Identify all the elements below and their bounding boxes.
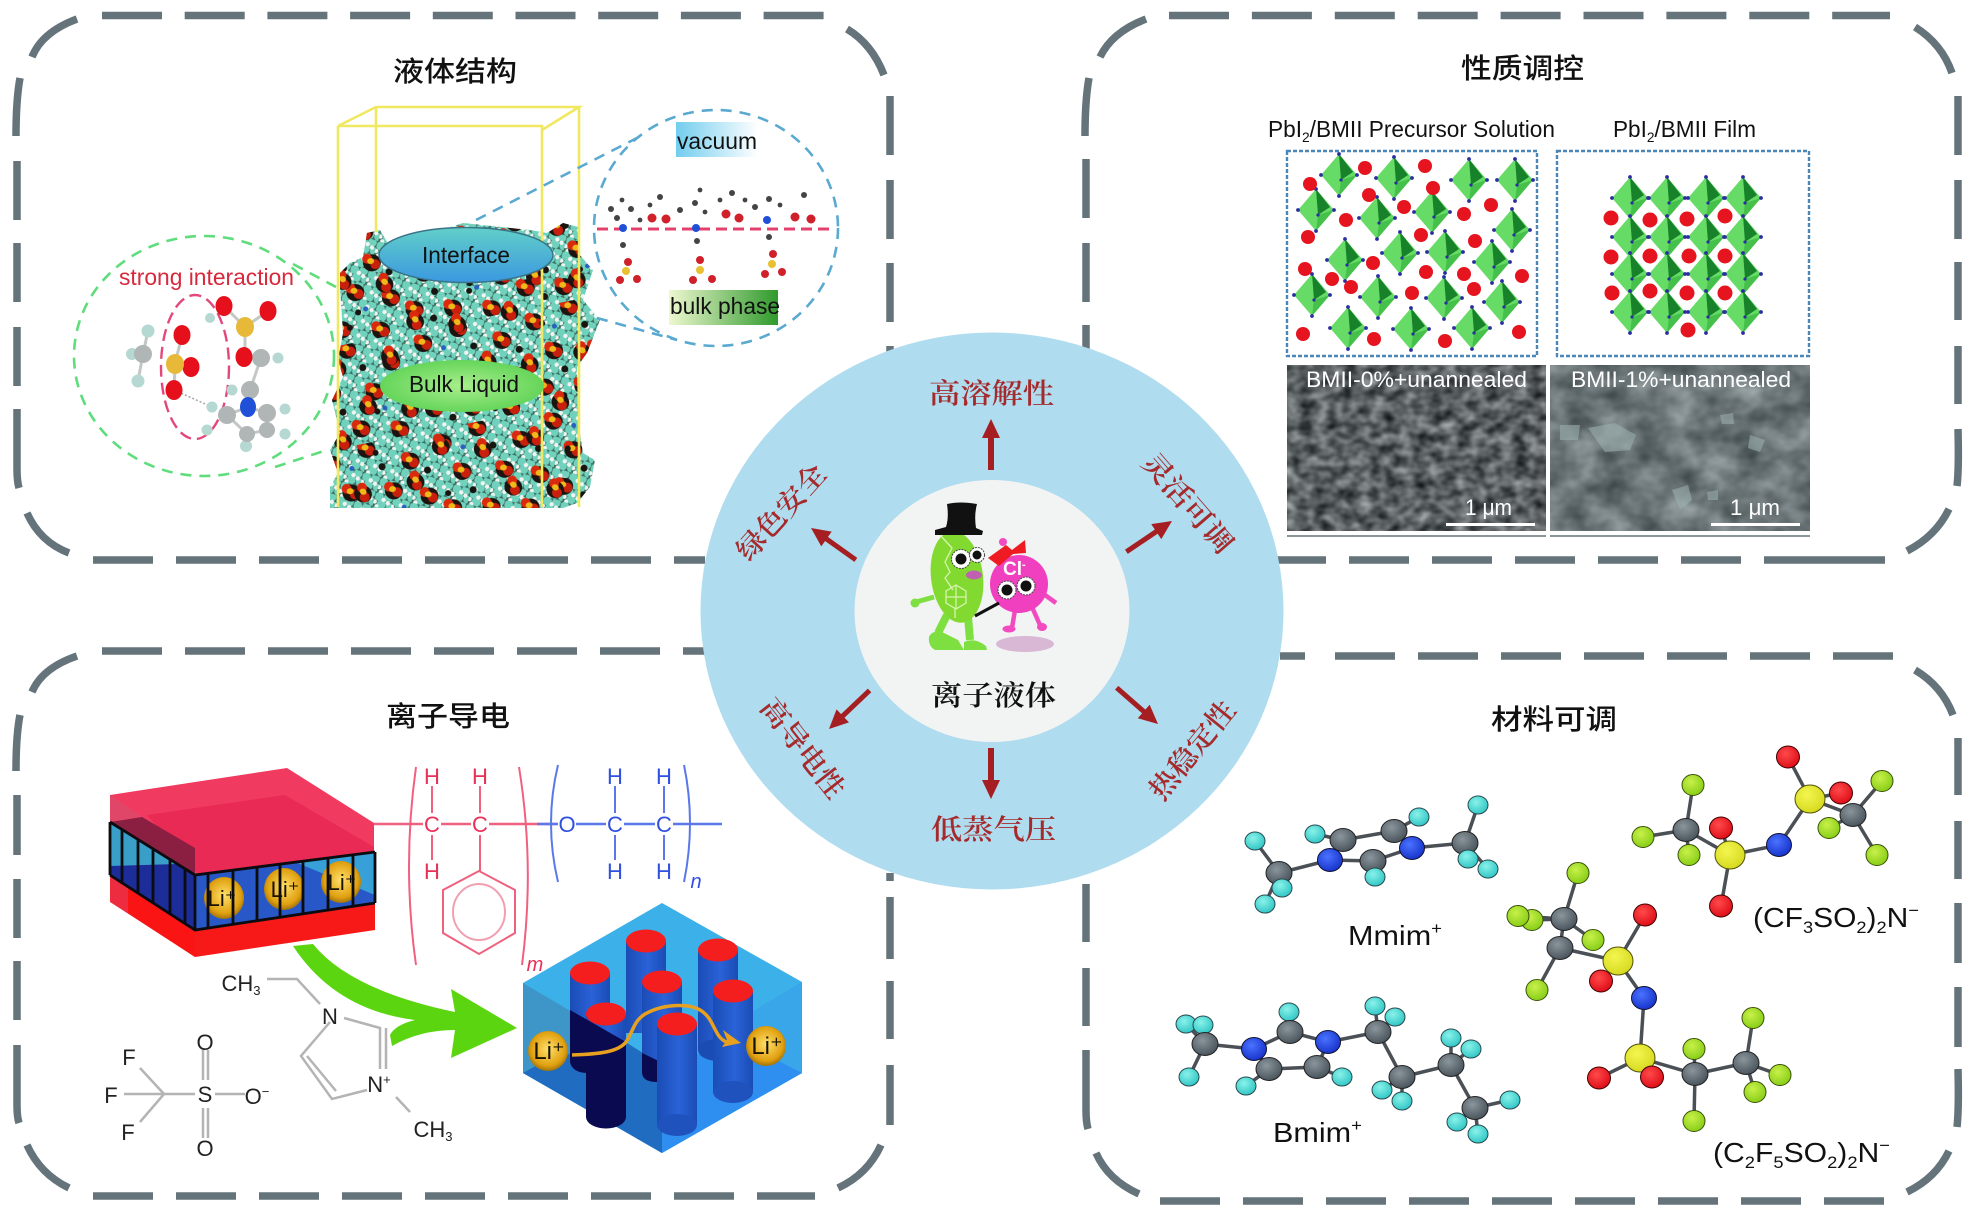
arrow: green curved bbox=[293, 944, 517, 1058]
imidazolium cation structure: N bbox=[322, 1004, 338, 1029]
label: (CF3SO2)2N-: ) bbox=[1867, 902, 1877, 933]
pink anion character: Cl bbox=[1003, 559, 1022, 580]
triflate anion structure: O bbox=[196, 1030, 214, 1055]
center title: 离子液体 bbox=[931, 680, 1056, 712]
ellipse: Interface: Interface bbox=[422, 242, 510, 268]
imidazolium cation structure bbox=[221, 971, 453, 1144]
lithium ions on cube: Li⁺ bbox=[751, 1033, 783, 1060]
SEM image: BMII-1%: 1 μm bbox=[1730, 495, 1780, 520]
lithium ions: Li⁺ bbox=[271, 877, 299, 902]
central circle: ionic liquid properties bbox=[700, 332, 1284, 890]
polymer structure formula: C bbox=[607, 812, 623, 837]
lithium ions bbox=[110, 822, 375, 930]
property: green and safe: 绿色安全 bbox=[730, 458, 833, 567]
property: flexible tuning: 灵活可调 bbox=[1135, 447, 1239, 560]
label: (C2F5SO2)2N-: F bbox=[1755, 1137, 1773, 1168]
SEM image: BMII-0%: BMII-0%+unannealed bbox=[1306, 367, 1527, 392]
panel: materials tuning bbox=[1086, 656, 1958, 1201]
label: Bmim+: + bbox=[1351, 1116, 1362, 1135]
label: (C2F5SO2)2N-: 5 bbox=[1773, 1153, 1784, 1172]
SEM image: BMII-0%: 1 μm bbox=[1465, 495, 1512, 520]
crystal diagram: precursor solution bbox=[1287, 151, 1537, 356]
polymer structure formula: H bbox=[607, 859, 623, 884]
ellipse: Bulk Liquid: Bulk Liquid bbox=[409, 371, 519, 397]
polymer structure formula: O bbox=[558, 812, 576, 837]
heading: liquid structure: 液体结构 bbox=[393, 56, 517, 87]
imidazolium cation structure: N bbox=[367, 1072, 383, 1097]
lithium ions on cube: Li⁺ bbox=[533, 1038, 565, 1065]
imidazolium cation structure: + bbox=[383, 1072, 391, 1087]
callout: interface zoom bbox=[476, 110, 838, 346]
arrow: ion path bbox=[572, 1005, 730, 1055]
property: thermal stability: 热稳定性 bbox=[1143, 695, 1242, 807]
polymer structure formula: H bbox=[472, 764, 488, 789]
bulk phase label: bulk phase bbox=[670, 293, 780, 319]
arrow: up bbox=[982, 419, 1000, 470]
molecule: Mmim+ bbox=[1245, 796, 1498, 913]
label: (C2F5SO2)2N-: 2 bbox=[1745, 1153, 1755, 1172]
label: precursor solution: 2 bbox=[1302, 129, 1310, 145]
triflate anion structure bbox=[104, 1030, 269, 1161]
label: (CF3SO2)2N-: 3 bbox=[1803, 918, 1813, 937]
polymer structure formula: C bbox=[656, 812, 672, 837]
arrow: northwest bbox=[806, 521, 861, 567]
triflate anion structure: − bbox=[262, 1084, 269, 1099]
nanostructure cube with cylinders bbox=[523, 903, 802, 1153]
label: Mmim+: Mmim bbox=[1348, 920, 1424, 951]
arrow: northeast bbox=[1121, 514, 1177, 559]
ellipse: Bulk Liquid bbox=[380, 360, 544, 412]
label: (CF3SO2)2N-: − bbox=[1908, 901, 1919, 920]
polymer structure formula: H bbox=[656, 859, 672, 884]
label: Mmim+: + bbox=[1431, 919, 1442, 938]
label: (C2F5SO2)2N-: N bbox=[1858, 1137, 1879, 1168]
label: (CF3SO2)2N-: N bbox=[1887, 902, 1908, 933]
SEM image: BMII-1%: BMII-1%+unannealed bbox=[1571, 367, 1791, 392]
layered block with Li ions bbox=[110, 768, 375, 957]
panel border: liquid structure bbox=[16, 16, 890, 560]
arrow: southeast bbox=[1111, 681, 1164, 731]
label: (C2F5SO2)2N-: ) bbox=[1837, 1137, 1847, 1168]
panel: property tuning bbox=[1085, 16, 1958, 560]
lithium ions on cube bbox=[528, 1026, 786, 1071]
lithium ions: Li⁺ bbox=[208, 886, 236, 911]
label: (C2F5SO2)2N-: 2 bbox=[1847, 1153, 1858, 1172]
heading: property tuning: 性质调控 bbox=[1461, 53, 1584, 84]
lithium ions: Li⁺ bbox=[328, 870, 356, 895]
panel border: property tuning bbox=[1085, 16, 1958, 560]
triflate anion structure: F bbox=[122, 1045, 136, 1070]
label: (CF3SO2)2N-: (CF bbox=[1753, 902, 1800, 933]
arrow: southwest bbox=[823, 684, 876, 736]
heading: materials tuning: 材料可调 bbox=[1491, 704, 1617, 735]
green cation character bbox=[910, 502, 988, 650]
crystal diagram: film bbox=[1557, 151, 1809, 356]
polymer structure formula bbox=[374, 764, 722, 976]
label: film: 2 bbox=[1647, 129, 1655, 145]
ellipse: Interface bbox=[379, 228, 553, 282]
pink anion character bbox=[975, 538, 1056, 632]
triflate anion structure: S bbox=[198, 1082, 212, 1107]
label: (CF3SO2)2N-: 2 bbox=[1877, 918, 1887, 937]
label: strong interaction: strong interaction bbox=[119, 264, 294, 290]
pink anion character: - bbox=[1022, 559, 1026, 571]
polymer structure formula: C bbox=[424, 812, 440, 837]
label: (CF3SO2)2N-: SO bbox=[1813, 902, 1856, 933]
label: (CF3SO2)2N-: 2 bbox=[1856, 918, 1867, 937]
panel border: materials tuning bbox=[1086, 656, 1958, 1201]
label: (C2F5SO2)2N-: − bbox=[1879, 1136, 1890, 1155]
imidazolium cation structure: 3 bbox=[445, 1129, 453, 1144]
simulation box with molecular liquid bbox=[325, 107, 605, 510]
triflate anion structure: O bbox=[245, 1084, 262, 1109]
mascot: cation and anion characters bbox=[910, 502, 1056, 652]
vacuum label: vacuum bbox=[677, 128, 757, 154]
polymer structure formula: H bbox=[607, 764, 623, 789]
SEM image: BMII-1% bbox=[1550, 365, 1810, 537]
label: film: PbI bbox=[1613, 116, 1648, 142]
polymer structure formula: m bbox=[527, 954, 543, 976]
label: precursor solution: /BMII Precursor Solution bbox=[1310, 116, 1555, 142]
label: (C2F5SO2)2N-: SO bbox=[1784, 1137, 1827, 1168]
outer ring bbox=[700, 332, 1284, 890]
polymer structure formula: H bbox=[424, 859, 440, 884]
panel: liquid structure bbox=[16, 16, 890, 560]
polymer structure formula: n bbox=[690, 871, 702, 893]
molecule: Bmim+ bbox=[1176, 997, 1520, 1143]
triflate anion structure: F bbox=[104, 1083, 118, 1108]
molecule: (C2F5SO2)2N- bbox=[1507, 862, 1791, 1132]
molecule: (CF3SO2)2N- bbox=[1632, 746, 1893, 917]
imidazolium cation structure: 3 bbox=[253, 983, 261, 998]
imidazolium cation structure: CH bbox=[413, 1117, 445, 1142]
polymer structure formula: C bbox=[472, 812, 488, 837]
property: high solubility: 高溶解性 bbox=[929, 378, 1054, 410]
SEM image: BMII-0% bbox=[1287, 365, 1546, 537]
triflate anion structure: F bbox=[121, 1120, 135, 1145]
panel: ionic conduction bbox=[16, 651, 890, 1196]
callout: strong interaction bbox=[74, 236, 336, 476]
imidazolium cation structure: CH bbox=[221, 971, 253, 996]
property: low vapor pressure: 低蒸气压 bbox=[931, 814, 1056, 846]
label: (C2F5SO2)2N-: 2 bbox=[1827, 1153, 1837, 1172]
inner disc bbox=[854, 480, 1130, 742]
property: high conductivity: 高导电性 bbox=[753, 692, 851, 805]
label: Bmim+: Bmim bbox=[1273, 1117, 1345, 1148]
label: film: /BMII Film bbox=[1655, 116, 1756, 142]
panel border: ionic conduction bbox=[16, 651, 890, 1196]
label: precursor solution: PbI bbox=[1268, 116, 1303, 142]
label: (C2F5SO2)2N-: (C bbox=[1713, 1137, 1743, 1168]
triflate anion structure: O bbox=[196, 1136, 214, 1161]
arrow: down bbox=[982, 748, 1000, 799]
heading: ionic conduction: 离子导电 bbox=[386, 701, 510, 732]
polymer structure formula: H bbox=[656, 764, 672, 789]
polymer structure formula: H bbox=[424, 764, 440, 789]
